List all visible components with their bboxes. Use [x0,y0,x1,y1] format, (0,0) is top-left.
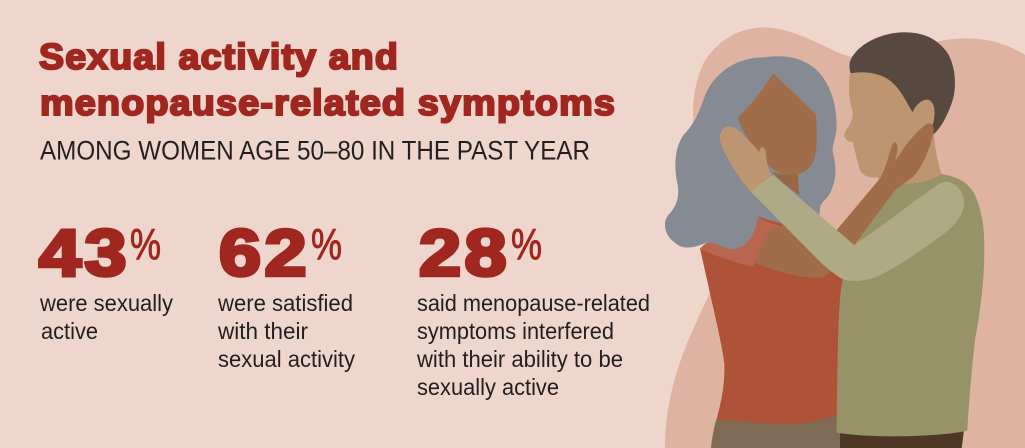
stat: 43 percent: 43 [39,216,130,290]
stat: 43 percent: active [41,318,98,344]
man torso [837,174,984,436]
illustration: embracing couple [665,27,1025,448]
background blob [665,27,1025,448]
man face [844,70,937,178]
collar line [757,215,782,225]
woman neck and chest [755,177,840,278]
man hair [849,32,955,134]
man hand on woman's cheek [720,126,772,193]
woman face [738,73,817,175]
woman hair [665,56,837,249]
stat: 43 percent: % [130,220,161,269]
man trousers [840,430,964,448]
stat: 43 percent [39,216,173,344]
stat: 28 percent: 28 [419,216,510,290]
man ear [912,100,935,135]
woman hand on man's cheek and arm [837,123,934,247]
woman top [700,233,847,424]
stat: 28 percent: said menopause-related [417,290,650,316]
stat: 62 percent [217,216,355,372]
stat: 62 percent: sexual activity [218,346,355,372]
stat: 28 percent: symptoms interfered [417,318,614,344]
title: menopause-related symptoms [40,82,616,123]
stat: 28 percent [416,216,650,400]
man sleeve [752,175,964,281]
stat: 43 percent: were sexually [39,290,173,316]
stat: 62 percent: with their [217,318,308,344]
stat: 62 percent: % [311,220,342,269]
man neck [877,130,947,197]
subtitle: AMONG WOMEN AGE 50–80 IN THE PAST YEAR [40,136,590,166]
woman neck under face [772,172,799,195]
stat: 62 percent: 62 [219,216,310,290]
woman trousers [711,412,842,448]
stat: 28 percent: % [511,220,542,269]
woman collar highlight [700,215,781,267]
stat: 28 percent: sexually active [417,374,559,400]
stat: 28 percent: with their ability to be [416,346,623,372]
title: Sexual activity and [39,36,399,77]
title [39,36,616,123]
stat: 62 percent: were satisfied [217,290,353,316]
